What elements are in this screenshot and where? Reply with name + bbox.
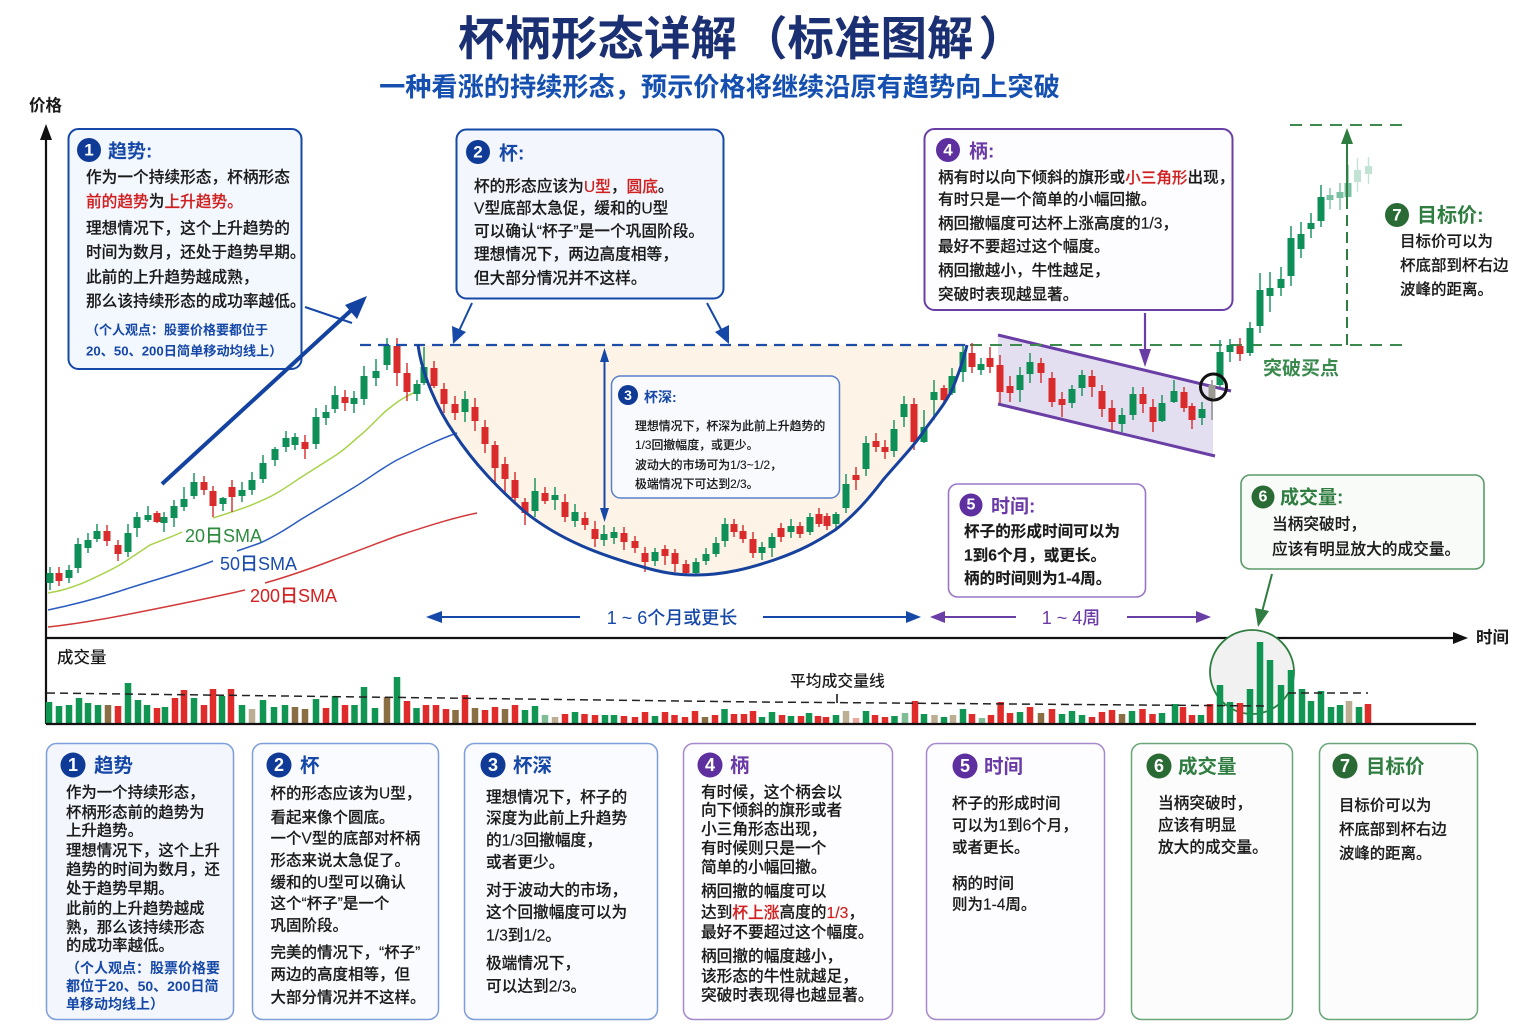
panel: bottom card 3 depth: 深度为此前上升趋势: [486, 810, 627, 828]
panel: cup callout: 2: [473, 142, 483, 162]
panel: bottom card 1 trend: 理想情况下，这个上升: [66, 842, 220, 860]
uptrend arrow: [162, 296, 367, 484]
panel: bottom card 1 trend: 的成功率越低。: [66, 936, 174, 954]
panel: handle callout: 柄回撤越小，牛性越足，: [938, 262, 1110, 280]
panel: handle callout: [924, 129, 1234, 310]
20-day SMA line: [48, 390, 420, 593]
panel: bottom card 5 time: 或者更长。: [952, 838, 1030, 856]
volume label: 成交量: [57, 647, 106, 667]
handle duration arrow: 1 ~ 4周: [1042, 608, 1100, 628]
handle flag channel: [998, 335, 1231, 456]
panel: bottom card 2 cup: 完美的情况下，“杯子”: [270, 942, 420, 962]
panel: bottom card 1 trend: （个人观点：股票价格要: [66, 960, 220, 976]
panel: bottom card 2 cup: 杯: [300, 755, 320, 777]
panel: bottom card 2 cup: 巩固阶段。: [270, 916, 348, 934]
panel: handle callout: 柄:: [969, 140, 994, 162]
panel: volume callout: 当柄突破时，: [1272, 516, 1366, 534]
panel: cup callout: 可以确认“杯子”是一个巩固阶段。: [474, 222, 704, 240]
panel: bottom card 1 trend: 单移动均线上）: [66, 996, 164, 1012]
rim dashed line: [360, 344, 968, 346]
candles: handle: [972, 343, 1212, 432]
title: 杯柄形态详解: [458, 13, 737, 65]
panel: bottom card 7 target: 杯底部到杯右边: [1339, 820, 1447, 838]
panel: bottom card 2 cup: 看起来像个圆底。: [270, 808, 395, 826]
volume breakout highlight: [1210, 630, 1294, 714]
panel: target price note: [1385, 203, 1509, 298]
average volume pointer: [836, 694, 838, 703]
panel: bottom card 2 cup: [252, 744, 438, 1020]
panel: target price note: 波峰的距离。: [1400, 280, 1493, 298]
cup left pointer arrow: [452, 303, 472, 344]
panel: bottom card 1 trend: 杯柄形态前的趋势为: [66, 804, 205, 822]
panel: time callout: 柄的时间则为1-4周。: [964, 570, 1111, 588]
panel: bottom card 2 cup: 杯的形态应该为U型，: [270, 784, 421, 802]
panel: depth callout: 1/3回撤幅度，或更少。: [635, 438, 759, 452]
panel: bottom card 5 time: 可以为1到6个月，: [952, 816, 1078, 834]
panel: cup callout: 杯的形态应该为U型，圆底。: [474, 176, 674, 196]
panel: trend callout: 此前的上升趋势越成熟，: [86, 268, 259, 286]
panel: target price note: 目标价可以为: [1400, 232, 1493, 250]
panel: bottom card 3 depth: 1/3到1/2。: [486, 926, 561, 944]
panel: target price note: 7: [1392, 206, 1402, 224]
panel: bottom card 5 time: 5: [960, 756, 970, 776]
panel: bottom card 5 time: 杯子的形成时间: [952, 794, 1061, 812]
cup right pointer arrow: [707, 303, 729, 344]
panel: bottom card 3 depth: 或者更少。: [486, 854, 564, 872]
SMA label: 200: 200日SMA: [250, 586, 337, 606]
panel: bottom card 5 time: 柄的时间: [952, 874, 1014, 892]
trend leader line: [305, 307, 352, 323]
panel: depth callout: 极端情况下可达到2/3。: [635, 477, 759, 491]
panel: bottom card 3 depth: 理想情况下，杯子的: [486, 788, 627, 806]
panel: bottom card 5 time: 则为1-4周。: [952, 896, 1036, 914]
panel: time callout: 1到6个月，或更长。: [964, 546, 1106, 564]
panel: handle callout: 突破时表现越显著。: [938, 286, 1078, 304]
panel: volume callout: 应该有明显放大的成交量。: [1272, 540, 1460, 558]
panel: bottom card 4 handle: [684, 744, 892, 1020]
panel: handle callout: 柄回撤幅度可达杯上涨高度的1/3，: [938, 214, 1178, 232]
panel: bottom card 4 handle: 柄: [730, 755, 750, 777]
panel: bottom card 1 trend: 趋势: [94, 755, 133, 777]
panel: time callout: 时间:: [991, 496, 1035, 518]
panel: volume callout: 6: [1259, 488, 1268, 506]
panel: bottom card 1 trend: 1: [68, 755, 78, 775]
panel: bottom card 4 handle: 该形态的牛性就越足，: [701, 966, 858, 986]
panel: bottom card 1 trend: 都位于20、50、200日简: [66, 978, 219, 994]
panel: target price note: 杯底部到杯右边: [1400, 256, 1509, 274]
cup shape: [418, 345, 967, 575]
panel: bottom card 7 target: [1320, 744, 1478, 1020]
panel: bottom card 4 handle: 有时候则只是一个: [701, 840, 827, 858]
panel: bottom card 3 depth: 可以达到2/3。: [486, 978, 586, 996]
panel: bottom card 3 depth: 极端情况下，: [486, 954, 580, 972]
SMA label: 20: 20日SMA: [185, 526, 262, 546]
cup outline: [418, 345, 967, 575]
title: （标准图解: [741, 13, 974, 65]
panel: bottom card 1 trend: 处于趋势早期。: [66, 880, 174, 898]
panel: cup callout: 理想情况下，两边高度相等，: [474, 246, 678, 264]
panel: bottom card 5 time: [926, 744, 1104, 1020]
panel: bottom card 1 trend: 熟，那么该持续形态: [66, 918, 205, 936]
panel: bottom card 1 trend: 此前的上升趋势越成: [66, 900, 205, 918]
breakout dashed line: [970, 344, 1402, 346]
average volume label: 平均成交量线: [790, 672, 885, 690]
candles: uptrend: [50, 338, 417, 590]
panel: depth callout: 杯深:: [644, 389, 677, 405]
price axis label: 价格: [29, 96, 62, 115]
panel: bottom card 2 cup: 缓和的U型可以确认: [270, 874, 406, 892]
panel: depth callout: 3: [624, 387, 632, 403]
panel: bottom card 6 volume: [1132, 744, 1292, 1020]
panel: volume callout: [1241, 475, 1484, 569]
panel: bottom card 4 handle: 有时候，这个柄会以: [701, 784, 842, 802]
panel: bottom card 3 depth: 这个回撤幅度可以为: [486, 904, 627, 922]
cup duration arrow: 1 ~ 6个月或更长: [607, 608, 737, 628]
panel: bottom card 3 depth: 的1/3回撤幅度，: [486, 832, 602, 850]
panel: trend callout: 前的趋势为上升趋势。: [86, 192, 243, 210]
panel: trend callout: （个人观点：股要价格要都位于: [86, 322, 268, 338]
panel: bottom card 3 depth: 杯深: [513, 755, 552, 777]
panel: bottom card 7 target: 目标价: [1366, 756, 1425, 778]
panel: time callout: [948, 484, 1146, 597]
panel: bottom card 6 volume: 当柄突破时，: [1158, 794, 1252, 812]
panel: trend callout: 1: [84, 140, 94, 160]
panel: bottom card 6 volume: 6: [1154, 756, 1164, 776]
panel: cup callout: [456, 130, 724, 298]
time axis label: 时间: [1476, 628, 1509, 647]
target height arrow: [1341, 128, 1353, 345]
panel: trend callout: 趋势:: [108, 140, 152, 162]
panel: bottom card 5 time: 时间: [984, 756, 1023, 778]
panel: target price note: 目标价:: [1417, 204, 1484, 227]
panel: cup callout: V型底部太急促，缓和的U型: [474, 200, 668, 218]
volume baseline: [46, 723, 1476, 725]
cup depth arrow: [600, 348, 609, 522]
panel: volume callout: 成交量:: [1280, 486, 1343, 508]
panel: bottom card 4 handle: 4: [705, 755, 715, 775]
panel: bottom card 7 target: 波峰的距离。: [1339, 844, 1431, 862]
panel: bottom card 4 handle: 最好不要超过这个幅度。: [701, 924, 874, 942]
panel: depth callout: 波动大的市场可为1/3~1/2，: [635, 458, 782, 472]
panel: trend callout: 那么该持续形态的成功率越低。: [86, 292, 306, 310]
panel: bottom card 4 handle: 向下倾斜的旗形或者: [701, 802, 842, 820]
cup duration arrow: [426, 608, 921, 628]
panel: trend callout: 理想情况下，这个上升趋势的: [86, 220, 290, 238]
average volume dashed line: [47, 693, 1368, 706]
subtitle: 一种看涨的持续形态，预示价格将继续沿原有趋势向上突破: [379, 72, 1060, 102]
breakout buy point label: 突破买点: [1263, 356, 1339, 380]
title: ）: [978, 13, 1025, 65]
panel: time callout: 杯子的形成时间可以为: [964, 522, 1120, 540]
panel: bottom card 7 target: 7: [1340, 756, 1350, 776]
panel: bottom card 3 depth: 3: [488, 755, 498, 775]
panel: trend callout: 20、50、200日简单移动均线上）: [86, 342, 282, 358]
50-day SMA line: [48, 433, 457, 610]
panel: trend callout: [68, 129, 306, 369]
breakout circle marker: [1200, 374, 1226, 400]
panel: bottom card 6 volume: 放大的成交量。: [1158, 838, 1268, 856]
panel: cup callout: 杯:: [499, 142, 524, 164]
panel: depth callout: 理想情况下，杯深为此前上升趋势的: [635, 419, 825, 433]
panel: bottom card 1 trend: 作为一个持续形态，: [66, 784, 205, 802]
panel: bottom card 2 cup: 大部分情况并不这样。: [270, 988, 426, 1006]
panel: depth callout: [612, 376, 840, 498]
panel: bottom card 6 volume: 成交量: [1178, 755, 1237, 778]
panel: bottom card 4 handle: 柄回撤的幅度越小，: [701, 948, 842, 966]
handle pointer arrow: [1139, 313, 1151, 367]
panel: bottom card 4 handle: 突破时表现得也越显著。: [701, 986, 874, 1004]
panel: bottom card 4 handle: 柄回撤的幅度可以: [701, 882, 827, 900]
panel: handle callout: 有时只是一个简单的小幅回撤。: [938, 190, 1156, 208]
panel: bottom card 3 depth: [464, 744, 658, 1020]
panel: bottom card 2 cup: 2: [274, 755, 284, 775]
SMA label: 50: 50日SMA: [220, 554, 297, 574]
200-day SMA line: [48, 513, 477, 627]
panel: bottom card 2 cup: 这个“杯子”是一个: [270, 894, 390, 912]
panel: bottom card 6 volume: 应该有明显: [1158, 816, 1237, 834]
time axis: [46, 632, 1468, 644]
panel: handle callout: 最好不要超过这个幅度。: [938, 238, 1110, 256]
price axis: [40, 124, 52, 724]
panel: bottom card 7 target: 目标价可以为: [1339, 796, 1431, 814]
panel: handle callout: 柄有时以向下倾斜的旗形或小三角形出现，: [938, 168, 1234, 186]
panel: bottom card 4 handle: 简单的小幅回撤。: [701, 858, 826, 876]
panel: bottom card 3 depth: 对于波动大的市场，: [486, 880, 627, 900]
panel: bottom card 1 trend: [46, 744, 234, 1020]
panel: bottom card 1 trend: 上升趋势。: [66, 822, 143, 840]
target dashed line: [1290, 124, 1402, 126]
volume bars: [49, 642, 1368, 724]
candles: cup: [424, 346, 963, 576]
panel: trend callout: 作为一个持续形态，杯柄形态: [86, 168, 290, 186]
panel: trend callout: 时间为数月，还处于趋势早期。: [86, 244, 306, 262]
candles: breakout: [1220, 157, 1368, 387]
volume pointer arrow: [1255, 574, 1272, 627]
handle duration arrow: [930, 608, 1211, 628]
panel: time callout: 5: [967, 496, 976, 514]
panel: handle callout: 4: [943, 140, 953, 160]
panel: bottom card 4 handle: 小三角形态出现，: [701, 820, 826, 838]
panel: bottom card 2 cup: 两边的高度相等，但: [270, 966, 411, 984]
panel: bottom card 4 handle: 达到杯上涨高度的1/3，: [701, 904, 864, 922]
panel: bottom card 2 cup: 形态来说太急促了。: [270, 852, 410, 870]
panel: bottom card 1 trend: 趋势的时间为数月，还: [66, 860, 221, 878]
panel: cup callout: 但大部分情况并不这样。: [474, 270, 647, 288]
panel: bottom card 2 cup: 一个V型的底部对杯柄: [270, 830, 420, 848]
